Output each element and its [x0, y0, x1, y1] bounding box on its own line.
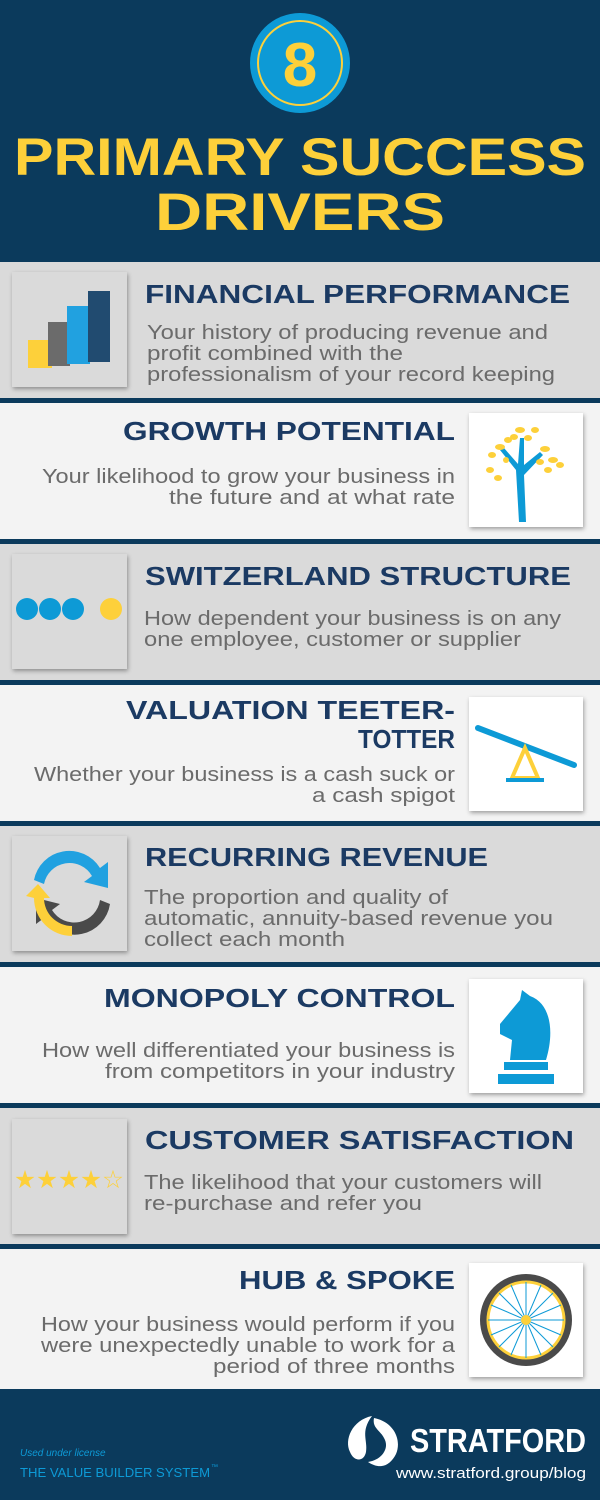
- panel: financial performance: profit combined with the: [147, 343, 403, 365]
- icon: wheel: [469, 1263, 583, 1377]
- panel: growth potential: Your likelihood to grow your business in: [42, 466, 455, 488]
- panel: switzerland structure: [12, 554, 571, 669]
- panel: valuation teeter-totter: a cash spigot: [312, 785, 456, 807]
- panel: customer satisfaction: CUSTOMER SATISFACTION: [145, 1125, 574, 1155]
- license text: ™: [211, 1464, 218, 1471]
- panel: valuation teeter-totter: VALUATION TEETER-: [126, 695, 455, 725]
- panel: recurring revenue: collect each month: [144, 929, 345, 951]
- stratford logo: [348, 1416, 586, 1482]
- badge: 8: 8: [283, 31, 317, 100]
- panel: monopoly control: How well differentiated your business is: [42, 1040, 455, 1062]
- license text: THE VALUE BUILDER SYSTEM: [20, 1465, 210, 1480]
- panel: hub & spoke: were unexpectedly unable to work for a: [40, 1335, 456, 1357]
- title: [14, 128, 586, 242]
- panel: switzerland structure: How dependent your business is on any: [144, 608, 561, 630]
- title: DRIVERS: [155, 183, 445, 242]
- license text: [20, 1448, 218, 1480]
- panel: recurring revenue: automatic, annuity-based revenue you: [144, 908, 553, 930]
- icon: chess knight: [469, 979, 583, 1093]
- panel: valuation teeter-totter: Whether your business is a cash suck or: [34, 764, 455, 786]
- icon: cycle arrows: [12, 836, 127, 951]
- panel: hub & spoke: period of three months: [213, 1356, 455, 1378]
- panel: customer satisfaction: [12, 1119, 574, 1234]
- license text: Used under license: [20, 1448, 106, 1459]
- panel: monopoly control: from competitors in your industry: [105, 1061, 455, 1083]
- panel: valuation teeter-totter: [34, 695, 583, 811]
- section backgrounds: [0, 262, 600, 1389]
- icon: seesaw: [469, 697, 583, 811]
- panel: hub & spoke: How your business would perform if you: [41, 1314, 455, 1336]
- footer: [0, 1389, 600, 1500]
- panel: growth potential: the future and at what rate: [169, 487, 455, 509]
- badge: 8: [250, 13, 350, 113]
- panel: customer satisfaction: The likelihood that your customers will: [144, 1172, 542, 1194]
- panel: financial performance: FINANCIAL PERFORMANCE: [145, 279, 570, 309]
- panel: hub & spoke: HUB & SPOKE: [239, 1265, 455, 1295]
- panel: monopoly control: MONOPOLY CONTROL: [104, 983, 455, 1013]
- icon: bar chart: [12, 272, 127, 387]
- panel: financial performance: [12, 272, 570, 387]
- panel: hub & spoke: [40, 1263, 583, 1378]
- title: PRIMARY SUCCESS: [14, 128, 586, 187]
- icon: stars: [12, 1119, 127, 1234]
- header background: [0, 0, 600, 262]
- stratford logo: www.stratford.group/blog: [395, 1465, 586, 1482]
- panel: financial performance: Your history of producing revenue and: [147, 322, 548, 344]
- panel: customer satisfaction: re-purchase and refer you: [144, 1193, 422, 1215]
- icon: dots: [12, 554, 127, 669]
- panel: switzerland structure: one employee, customer or supplier: [144, 629, 521, 651]
- panel: switzerland structure: SWITZERLAND STRUCTURE: [145, 561, 571, 591]
- panel: valuation teeter-totter: TOTTER: [358, 724, 455, 754]
- panel: financial performance: professionalism of your record keeping: [147, 364, 555, 386]
- panel: growth potential: GROWTH POTENTIAL: [123, 416, 455, 446]
- panel: recurring revenue: RECURRING REVENUE: [145, 842, 488, 872]
- icon: stars: ★★★★☆: [14, 1165, 124, 1194]
- panel: monopoly control: [42, 979, 583, 1093]
- panel: growth potential: [42, 413, 583, 527]
- icon: tree: [469, 413, 583, 527]
- panel: recurring revenue: The proportion and quality of: [144, 887, 449, 909]
- panel: recurring revenue: [12, 836, 553, 951]
